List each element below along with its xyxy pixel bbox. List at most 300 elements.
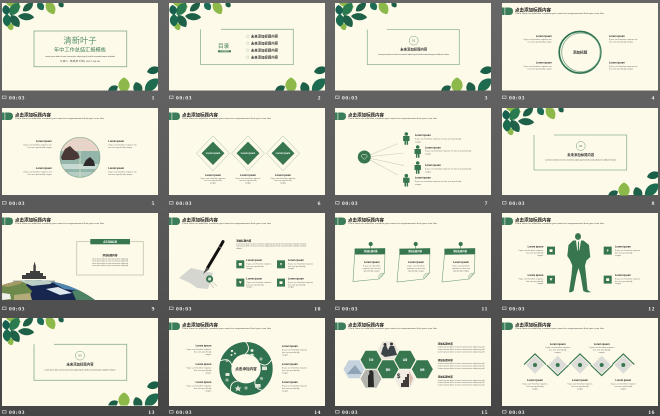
ring chart: [559, 32, 601, 73]
text blocks: has one specifically ranges: [528, 68, 552, 70]
text blocks: Lorem ipsum: [36, 140, 52, 143]
text blocks: If you can therefore requires: [246, 281, 271, 284]
text blocks: If you can therefore requires: [282, 367, 307, 370]
slide footers: durations and numbers: 00:03: [176, 306, 192, 312]
text blocks: If you can therefore requires me: [108, 170, 138, 173]
slide footers: durations and numbers: 14: [314, 410, 321, 416]
slide 8: section: [502, 108, 658, 196]
note 1: [353, 242, 385, 282]
note 1: Lorem ipsum: [364, 261, 380, 264]
text blocks: Lorem ipsum: [196, 381, 212, 384]
text blocks: ranges: [577, 388, 583, 390]
header: Click here to add the content you want to requirement that you use the: [15, 222, 105, 225]
text blocks: has one specifically: [288, 284, 305, 286]
slide 11: pinned notes: [335, 213, 491, 300]
circular photo: [60, 137, 100, 178]
hexagon cluster: 策划: [386, 367, 391, 371]
header: [335, 111, 438, 120]
contents box: 未来添加标题内容: [251, 48, 279, 52]
slide footers: durations and numbers: 5: [152, 201, 155, 207]
note 2: 添加标题内容: [408, 249, 423, 253]
text blocks: ranges: [282, 354, 288, 356]
text blocks: If you can therefore requires: [518, 249, 543, 252]
text blocks: If you can therefore requires me has one specifically: [425, 150, 471, 153]
text blocks: has one specifically: [615, 386, 632, 388]
text blocks: has one specifically: [571, 386, 589, 388]
header: Click here to add the content you want to requirement that you use the: [15, 117, 105, 120]
text blocks: Lorem ipsum: [36, 167, 52, 170]
text blocks: [246, 259, 313, 289]
slide footers: durations and numbers: 00:03: [176, 96, 192, 102]
diamond row: [524, 354, 634, 376]
header: [169, 111, 272, 120]
section box: [367, 30, 459, 65]
text blocks: Lorem ipsum: [615, 274, 631, 277]
text blocks: If you can therefore requires me: [108, 143, 138, 146]
text blocks: ranges: [210, 182, 216, 184]
text blocks: has one specifically: [204, 180, 222, 182]
hexagon cluster: 市场: [369, 358, 374, 362]
text blocks: [23, 140, 138, 176]
header: Click here to add the content you want to requirement that you use the: [515, 327, 605, 330]
text blocks: has one specifically: [194, 352, 211, 354]
text blocks: ranges: [282, 390, 288, 392]
text blocks: has one specifically: [274, 180, 292, 182]
title box: Lorem ipsum dolor sit amet consectetur adipiscing elit sed do eiusmod tempor incididunt: [45, 55, 115, 58]
section box: Lorem ipsum dolor sit amet consectetur adipiscing elit sed do eiusmod tempor incididunt ut labore: [44, 369, 116, 372]
text blocks: Lorem ipsum: [536, 62, 552, 64]
text blocks: ranges: [532, 388, 538, 390]
leaves bottom right: [608, 171, 658, 196]
text blocks: [415, 134, 471, 186]
text blocks: If you can therefore requires: [545, 346, 570, 349]
text blocks: has one specifically ranges: [528, 41, 552, 43]
ring chart: 添加标题: [573, 50, 588, 55]
contents box: 未来添加标题内容: [251, 54, 279, 60]
header: Click here to add the content you want to requirement that you use the: [515, 222, 605, 225]
diamonds: Lorem ipsum: [241, 153, 255, 155]
header: [335, 216, 438, 225]
leaves top left: [2, 3, 64, 30]
header: 点击添加标题内容: [15, 216, 52, 223]
text blocks: ranges: [415, 184, 421, 186]
text blocks: ranges: [615, 283, 621, 285]
slide footers: durations and numbers: 00:03: [509, 410, 525, 416]
text frame: Lorem ipsum dolor sit amet consectetur adipiscing: [92, 262, 128, 265]
text blocks: Lorem ipsum dolor sit amet consectetur adipiscing elit: [438, 350, 485, 353]
text frame: Lorem ipsum dolor sit amet consectetur adipiscing: [92, 257, 128, 260]
text blocks: Lorem ipsum: [536, 35, 552, 38]
text blocks: 添加标题内容: [438, 358, 453, 362]
leaves bottom right: [275, 66, 325, 90]
text blocks: ranges: [245, 182, 251, 184]
slide footers: durations and numbers: 9: [152, 306, 155, 312]
text blocks: Lorem ipsum: [609, 35, 625, 38]
text blocks: If you can therefore requires: [282, 385, 307, 388]
text blocks: Lorem ipsum: [108, 140, 125, 143]
header: 点击添加标题内容: [182, 216, 218, 223]
intro text: Lorem ipsum dolor sit amet consectetur adipiscing elit sed do eiusmod tempor incididunt ut labore: [236, 242, 307, 245]
text blocks: Lorem ipsum: [415, 134, 431, 137]
text blocks: Lorem ipsum: [415, 176, 431, 179]
slide footers: durations and numbers: 2: [318, 96, 321, 102]
header: [169, 216, 272, 225]
section box: 未来添加标题内容: [66, 361, 94, 366]
header: 点击添加标题内容: [515, 216, 552, 223]
icon squares: [236, 260, 285, 287]
note 3: If you can therefore: [452, 265, 471, 268]
text blocks: has one specifically ranges: [28, 147, 52, 149]
hexagon cluster: 运营: [403, 358, 408, 362]
contents box: CONTENTS: [220, 51, 229, 53]
section box: 02: [579, 144, 583, 148]
text blocks: Lorem ipsum dolor sit amet consectetur adipiscing elit: [438, 379, 485, 382]
header: 点击添加标题内容: [182, 321, 218, 328]
slide 6: three diamonds: [169, 108, 325, 195]
text blocks: If you can therefore requires me: [523, 65, 553, 68]
diamonds: [196, 136, 300, 171]
slide footers: durations and numbers: 00:03: [176, 201, 192, 207]
text blocks: If you can therefore requires me: [523, 38, 553, 41]
text frame: Lorem ipsum dolor sit amet consectetur adipiscing: [92, 260, 128, 263]
people icons: [403, 132, 421, 186]
title box: 清新叶子: [63, 35, 97, 45]
note 1: If you can therefore: [363, 265, 381, 268]
text blocks: has one specifically: [526, 252, 543, 254]
icon squares: [547, 247, 612, 284]
text blocks: has one specifically: [615, 252, 632, 254]
text blocks: ranges: [615, 255, 621, 257]
slide footers: durations and numbers: 00:03: [9, 306, 25, 312]
text blocks: Lorem ipsum dolor sit amet consectetur adipiscing elit: [438, 346, 485, 349]
text blocks: Lorem ipsum dolor sit amet consectetur adipiscing elit: [438, 348, 485, 351]
leaves bottom right: [108, 381, 158, 406]
text blocks: has one specifically: [282, 388, 299, 390]
slide footers: durations and numbers: 00:03: [342, 201, 358, 207]
text blocks: has one specifically: [615, 281, 632, 283]
slide 14: circular process: [169, 318, 325, 406]
header: Click here to add the content you want to requirement that you use the: [348, 222, 438, 225]
text blocks: Lorem ipsum dolor sit amet consectetur adipiscing elit: [438, 384, 485, 387]
text blocks: Lorem ipsum: [282, 381, 298, 384]
text blocks: Lorem ipsum: [288, 259, 304, 262]
slide 7: radial people: [335, 108, 491, 195]
text blocks: has one specifically: [288, 266, 305, 268]
text blocks: [522, 343, 636, 390]
text blocks: has one specifically ranges: [28, 174, 52, 176]
slide footers: durations and numbers: 7: [485, 201, 488, 207]
contents box: 未来添加标题内容: [251, 40, 279, 46]
text blocks: ranges: [555, 352, 561, 354]
contents box: 目录: [218, 42, 230, 50]
text blocks: If you can therefore requires me: [609, 65, 638, 68]
text blocks: Lorem ipsum: [615, 246, 631, 249]
text blocks: has one specifically: [593, 350, 610, 352]
text blocks: has one specifically: [282, 352, 299, 354]
leaves top left: [335, 3, 397, 30]
text blocks: If you can therefore requires me has one specifically: [415, 180, 461, 183]
text blocks: has one specifically: [194, 370, 211, 372]
section box: [534, 135, 627, 170]
note 3: [442, 242, 475, 282]
text blocks: has one specifically: [246, 266, 264, 268]
leaves bottom right: [108, 66, 158, 90]
text blocks: Lorem ipsum: [528, 246, 544, 249]
intro text: 添加标题内容: [236, 239, 252, 243]
city skyline: [13, 262, 55, 282]
title box: 汇报人: 某某某 时间: 2017.06.30: [60, 59, 101, 63]
diamonds: Lorem ipsum: [276, 153, 290, 155]
text blocks: Lorem ipsum: [282, 345, 298, 348]
note 1: requires me has one: [363, 268, 382, 270]
header: [502, 216, 605, 225]
slide 12: businessman: [502, 213, 658, 300]
text blocks: ranges: [288, 268, 294, 270]
header: Click here to add the content you want to requirement that you use the: [348, 117, 438, 120]
text blocks: ranges: [280, 182, 286, 184]
pen: [203, 242, 223, 274]
note 2: Lorem ipsum: [408, 261, 425, 264]
text blocks: has one specifically ranges: [609, 41, 633, 43]
note 2: specifically ranges: [408, 270, 424, 272]
slide footers: durations and numbers: 4: [652, 96, 655, 102]
radial diagram: [358, 144, 404, 175]
slide footers: durations and numbers: 1: [152, 96, 155, 102]
header: Click here to add the content you want to requirement that you use the: [515, 12, 605, 15]
slide footers: durations and numbers: 00:03: [176, 410, 192, 416]
header: Click here to add the content you want to requirement that you use the: [182, 222, 272, 225]
text blocks: If you can therefore requires: [186, 367, 211, 370]
slide footers: durations and numbers: [2, 96, 655, 416]
header: [502, 321, 605, 330]
slide 5: circle photo: [2, 108, 158, 195]
text blocks: Lorem ipsum: [594, 343, 610, 346]
hexagon cluster: [344, 341, 433, 388]
header: Click here to add the content you want to requirement that you use the: [348, 327, 438, 330]
slide footers: durations and numbers: 11: [482, 306, 488, 312]
header: Click here to add the content you want to requirement that you use the: [182, 327, 272, 330]
text blocks: has one specifically: [246, 284, 264, 286]
text blocks: If you can therefore requires me: [23, 143, 53, 146]
slide footers: durations and numbers: 10: [314, 306, 321, 312]
text blocks: ranges: [425, 154, 431, 156]
text blocks: Lorem ipsum dolor sit amet consectetur adipiscing elit: [438, 367, 485, 370]
text blocks: If you can therefore requires: [611, 382, 636, 386]
text blocks: If you can therefore requires me: [23, 170, 53, 173]
text blocks: If you can therefore requires: [282, 349, 307, 352]
text blocks: If you can therefore requires: [235, 177, 261, 180]
text blocks: has one specifically ranges: [108, 174, 132, 176]
header: 点击添加标题内容: [515, 6, 552, 13]
section box: Lorem ipsum dolor sit amet consectetur adipiscing elit sed do eiusmod tempor incididunt ut labore: [378, 53, 450, 56]
text blocks: has one specifically: [239, 180, 257, 182]
text blocks: Lorem ipsum: [609, 62, 625, 64]
text blocks: has one specifically: [526, 281, 543, 283]
slide footers: durations and numbers: 00:03: [509, 306, 525, 312]
header: 点击添加标题内容: [348, 216, 384, 223]
note 3: specifically ranges: [453, 270, 469, 272]
note 2: requires me has one: [407, 268, 426, 270]
text blocks: Lorem ipsum: [205, 174, 222, 177]
header: 点击添加标题内容: [348, 111, 384, 118]
text frame: Lorem ipsum dolor sit amet consectetur adipiscing: [92, 264, 128, 267]
text blocks: If you can therefore requires: [288, 262, 313, 266]
text blocks: Lorem ipsum: [240, 174, 257, 177]
circular process ring: [220, 341, 273, 392]
hexagon cluster: $: [397, 374, 401, 380]
text blocks: Lorem ipsum: [527, 379, 544, 382]
header: 点击添加标题内容: [15, 111, 52, 118]
text blocks: If you can therefore requires: [589, 346, 614, 349]
slide 9: earth: [2, 213, 158, 300]
text blocks: If you can therefore requires: [615, 277, 640, 280]
diamonds: Lorem ipsum: [206, 153, 220, 155]
earth globe: [2, 280, 95, 300]
paper with seal: [179, 268, 217, 289]
slide footers: durations and numbers: 00:03: [9, 410, 25, 416]
text blocks: Lorem ipsum: [528, 274, 544, 277]
slide footers: durations and numbers: 16: [648, 410, 655, 416]
header: 点击添加标题内容: [182, 111, 218, 118]
slide footers: durations and numbers: 3: [485, 96, 488, 102]
contents box: [201, 29, 293, 65]
text blocks: If you can therefore requires: [186, 348, 211, 351]
slide footers: durations and numbers: 00:03: [9, 96, 25, 102]
text blocks: Lorem ipsum: [275, 174, 292, 177]
slide 4: ring: [502, 3, 658, 90]
header: [169, 321, 272, 330]
text blocks: Lorem ipsum: [246, 259, 263, 262]
header: [2, 216, 105, 225]
intro text: dolore: [236, 248, 243, 250]
text blocks: Lorem ipsum: [550, 343, 566, 346]
text blocks: has one specifically: [526, 386, 544, 388]
leaves top left: [502, 108, 564, 136]
text blocks: If you can therefore requires me: [609, 38, 638, 41]
slide 3: section: [335, 3, 491, 90]
text blocks: ranges: [282, 372, 288, 374]
header: [502, 6, 605, 15]
text blocks: Lorem ipsum: [288, 278, 304, 281]
text blocks: Lorem ipsum dolor sit amet consectetur adipiscing elit: [438, 362, 485, 365]
text blocks: If you can therefore requires: [186, 385, 211, 388]
header: Click here to add the content you want to requirement that you use the: [182, 117, 272, 120]
header: 点击添加标题内容: [515, 321, 552, 328]
note 3: Lorem ipsum: [453, 261, 470, 264]
note 2: If you can therefore: [407, 265, 426, 268]
slide footers: durations and numbers: 13: [148, 410, 155, 416]
text blocks: If you can therefore requires: [270, 177, 296, 180]
slide 16: diamond row: [502, 318, 658, 406]
text frame: [77, 239, 143, 275]
text blocks: Lorem ipsum: [246, 278, 263, 281]
slide 13: section: [2, 318, 158, 406]
text blocks: If you can therefore requires: [288, 281, 313, 284]
note 1: specifically ranges: [364, 270, 380, 272]
text blocks: ranges: [246, 287, 252, 289]
text frame: 点击添加标题: [103, 240, 118, 244]
text blocks: Lorem ipsum: [108, 167, 125, 170]
note 3: requires me has one: [452, 268, 471, 270]
leaves bottom right: [441, 66, 491, 90]
text blocks: [200, 174, 296, 184]
slide footers: durations and numbers: 00:03: [342, 410, 358, 416]
text blocks: ranges: [537, 255, 543, 257]
note 2: [397, 242, 430, 282]
text blocks: If you can therefore requires: [567, 382, 593, 386]
text blocks: has one specifically ranges: [609, 68, 633, 70]
section box: Lorem ipsum dolor sit amet consectetur adipiscing elit sed do eiusmod tempor incididunt ut labore: [545, 158, 617, 162]
text blocks: Lorem ipsum: [425, 164, 441, 167]
note 3: 添加标题内容: [453, 249, 468, 253]
text blocks: ranges: [415, 141, 421, 143]
text blocks: [518, 246, 640, 285]
text blocks: ranges: [599, 352, 605, 354]
text blocks: has one specifically ranges: [108, 147, 132, 149]
text blocks: If you can therefore requires: [518, 277, 543, 280]
text blocks: [523, 35, 638, 70]
text frame: 添加标题内容: [102, 253, 118, 257]
text blocks: If you can therefore requires: [200, 177, 226, 180]
slide 2: contents: [169, 3, 325, 90]
text blocks: If you can therefore requires: [522, 382, 548, 386]
text blocks: Lorem ipsum: [282, 363, 298, 366]
leaves top left: [2, 318, 64, 346]
section box: 01: [412, 39, 416, 43]
text blocks: If you can therefore requires: [615, 249, 640, 252]
text blocks: Lorem ipsum: [196, 345, 212, 348]
text blocks: If you can therefore requires me has one specifically: [415, 138, 461, 141]
slide 15: hexagons: [335, 318, 491, 406]
section box: [34, 344, 127, 380]
slide footers: durations and numbers: 00:03: [9, 201, 25, 207]
text blocks: Lorem ipsum: [572, 379, 589, 382]
header: [335, 321, 438, 330]
slide footers: durations and numbers: 00:03: [342, 306, 358, 312]
slide footers: durations and numbers: 00:03: [509, 201, 525, 207]
text blocks: ranges: [205, 354, 211, 356]
intro text: [236, 239, 307, 250]
text blocks: ranges: [205, 390, 211, 392]
header: 点击添加标题内容: [348, 321, 384, 328]
text blocks: ranges: [288, 287, 294, 289]
title box: [34, 31, 127, 67]
text blocks: [438, 341, 485, 387]
text blocks: ranges: [246, 268, 252, 270]
text blocks: If you can therefore requires: [246, 262, 271, 266]
text blocks: 添加标题内容: [438, 341, 453, 345]
section box: 03: [78, 354, 82, 358]
intro text: Lorem ipsum dolor sit amet consectetur adipiscing elit sed do eiusmod tempor incididunt ut labore: [236, 245, 307, 248]
leaves top left: [169, 3, 231, 30]
slide 10: pen and contract: [169, 213, 325, 300]
slide footers: durations and numbers: 8: [652, 201, 655, 207]
text blocks: 添加标题内容: [438, 375, 453, 379]
header: [2, 111, 105, 120]
title box: 年中工作总结汇报模板: [54, 46, 107, 54]
text blocks: Lorem ipsum: [615, 379, 632, 382]
text blocks: ranges: [620, 388, 626, 390]
text blocks: Lorem ipsum dolor sit amet consectetur adipiscing elit: [438, 381, 485, 384]
slide footers: durations and numbers: 00:03: [509, 96, 525, 102]
text blocks: If you can therefore requires me has one specifically: [425, 168, 471, 170]
text blocks: [186, 345, 307, 392]
note 1: 添加标题内容: [364, 249, 378, 253]
businessman silhouette: [567, 233, 591, 292]
text blocks: has one specifically: [194, 388, 211, 390]
slide footers: durations and numbers: 6: [318, 201, 321, 207]
hexagon cluster: 创意: [420, 367, 425, 371]
